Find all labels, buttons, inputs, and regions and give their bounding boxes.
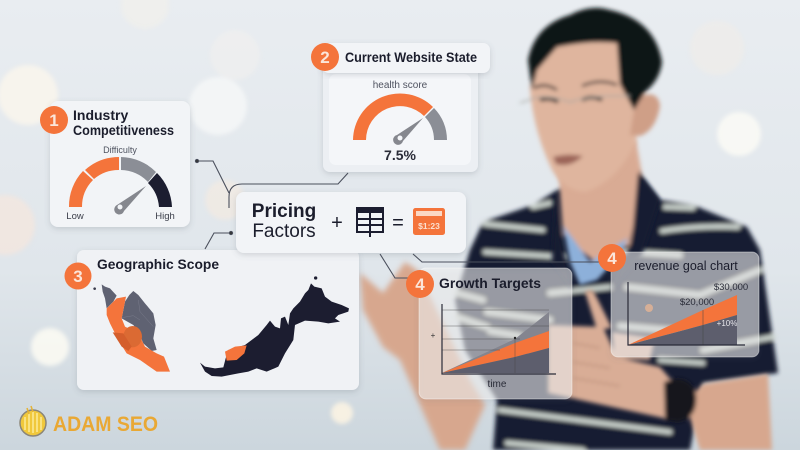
badge 4: 4 (415, 275, 425, 294)
badge 4 (406, 270, 434, 298)
area chart: revenue: $20,000 (680, 297, 714, 308)
heading: Growth Targets: Growth Targets (439, 275, 541, 291)
gauge: difficulty: Difficulty (103, 145, 137, 155)
gauge: difficulty: Low (66, 211, 84, 222)
area chart: revenue: $30,000 (714, 282, 748, 293)
gauge: health score: health score (373, 80, 428, 91)
badge 4 second: 4 (607, 249, 617, 268)
heading: Industry Competitiveness: Industry (73, 107, 128, 123)
torso with striped polo shirt (455, 170, 778, 450)
heading: Pricing Factors: Factors (252, 221, 316, 242)
heading: Current Website State: Current Website State (345, 49, 477, 65)
gauge: difficulty: High (155, 211, 175, 222)
area chart: growth: + (431, 331, 436, 340)
neck, collar (552, 140, 660, 290)
heading: Geographic Scope: Geographic Scope (97, 256, 219, 272)
panel 3: Geographic Scope (64, 250, 359, 390)
badge 1 (40, 106, 68, 134)
badge 4 second (598, 244, 626, 272)
map: Peninsular Malaysia (93, 284, 170, 372)
heading: Industry Competitiveness: Competitiveness (73, 122, 174, 138)
connector lines (195, 159, 600, 278)
title pill (322, 43, 490, 73)
icon: price card (413, 208, 445, 235)
gauge: health score: 7.5% (384, 147, 417, 163)
heading: Pricing Factors: Pricing (252, 201, 316, 222)
heading: revenue goal chart: revenue goal chart (634, 259, 738, 273)
area chart: revenue: +10% (717, 319, 737, 328)
icon: price card: $1:23 (418, 221, 440, 231)
gauge: difficulty (66, 145, 175, 222)
area chart: growth (431, 304, 556, 390)
badge 2: 2 (320, 48, 330, 67)
area chart: growth: time (488, 379, 507, 390)
map: East Malaysia (200, 276, 349, 377)
badge 3 (64, 262, 92, 290)
panel: Growth Targets (406, 268, 572, 399)
badge 3: 3 (73, 267, 83, 286)
right hand, forearm and watch (548, 290, 772, 450)
icon: table (357, 208, 383, 237)
logo: Adam SEO (20, 406, 158, 436)
person, blurred background photo (360, 8, 778, 450)
head (520, 8, 662, 192)
left hand and forearm (360, 262, 485, 450)
equals sign: = (392, 212, 404, 234)
panel: revenue goal chart (598, 244, 759, 357)
plus sign: + (331, 212, 343, 234)
panel 2: Current Website State (311, 43, 490, 172)
gauge: health score (353, 80, 447, 163)
panel 1: Industry Competitiveness (40, 101, 190, 227)
area chart: revenue (628, 282, 748, 345)
badge 1: 1 (49, 111, 59, 130)
panel: Pricing Factors (236, 192, 466, 253)
logo: Adam SEO: ADAM SEO (53, 413, 158, 436)
badge 2 (311, 43, 339, 71)
